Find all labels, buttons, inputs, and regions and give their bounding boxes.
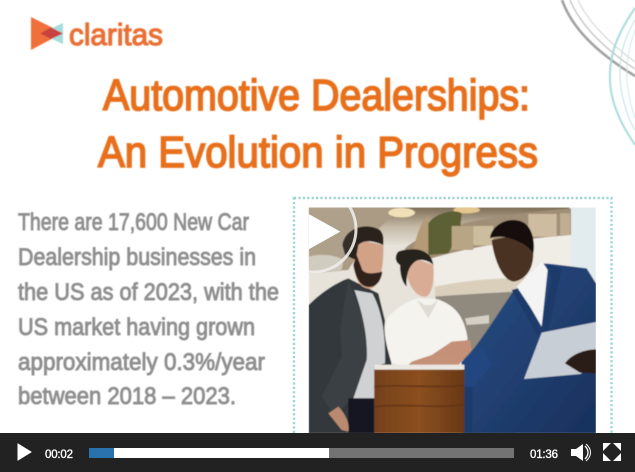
- photo: three people at a car dealership: [308, 207, 596, 433]
- icon: volume: [571, 444, 590, 461]
- wood podium: [374, 365, 464, 370]
- dotted teal photo frame: [294, 198, 612, 438]
- body text block: There are 17,600 New Car: [18, 209, 249, 236]
- body text block: US market having grown: [18, 314, 255, 341]
- woman in center: [385, 298, 468, 365]
- logo wordmark: claritas: [69, 17, 163, 52]
- video play ring overlay: [308, 208, 358, 274]
- decorative gray and teal brush circles: [562, 0, 635, 145]
- video controls bar: [0, 433, 635, 472]
- title: Automotive Dealerships:: [103, 71, 530, 120]
- body text block: between 2018 – 2023.: [18, 383, 236, 410]
- body text block: the US as of 2023, with the: [18, 279, 279, 306]
- progress bar: [89, 448, 514, 458]
- dealer hand: [565, 349, 596, 373]
- title: An Evolution in Progress: [98, 128, 538, 177]
- title: [98, 71, 538, 177]
- elapsed time: 00:02: [45, 449, 73, 461]
- man on left: [309, 278, 392, 433]
- icon: bow-tie logo mark: [31, 17, 63, 50]
- total time: 01:36: [530, 449, 558, 461]
- body text block: approximately 0.3%/year: [18, 349, 265, 376]
- icon: play button: [18, 444, 31, 460]
- plant and pots: [427, 211, 462, 255]
- woman's hand: [429, 353, 458, 364]
- dealer man with blue suit: [462, 263, 596, 433]
- car wheel: [472, 432, 514, 433]
- body text block: [18, 209, 279, 410]
- showroom background: [308, 245, 512, 371]
- mezzanine balcony: [405, 208, 571, 258]
- icon: fullscreen: [603, 443, 621, 461]
- body text block: Dealership businesses in: [18, 244, 256, 271]
- claritas logo: [31, 17, 163, 52]
- paper document: [524, 322, 596, 379]
